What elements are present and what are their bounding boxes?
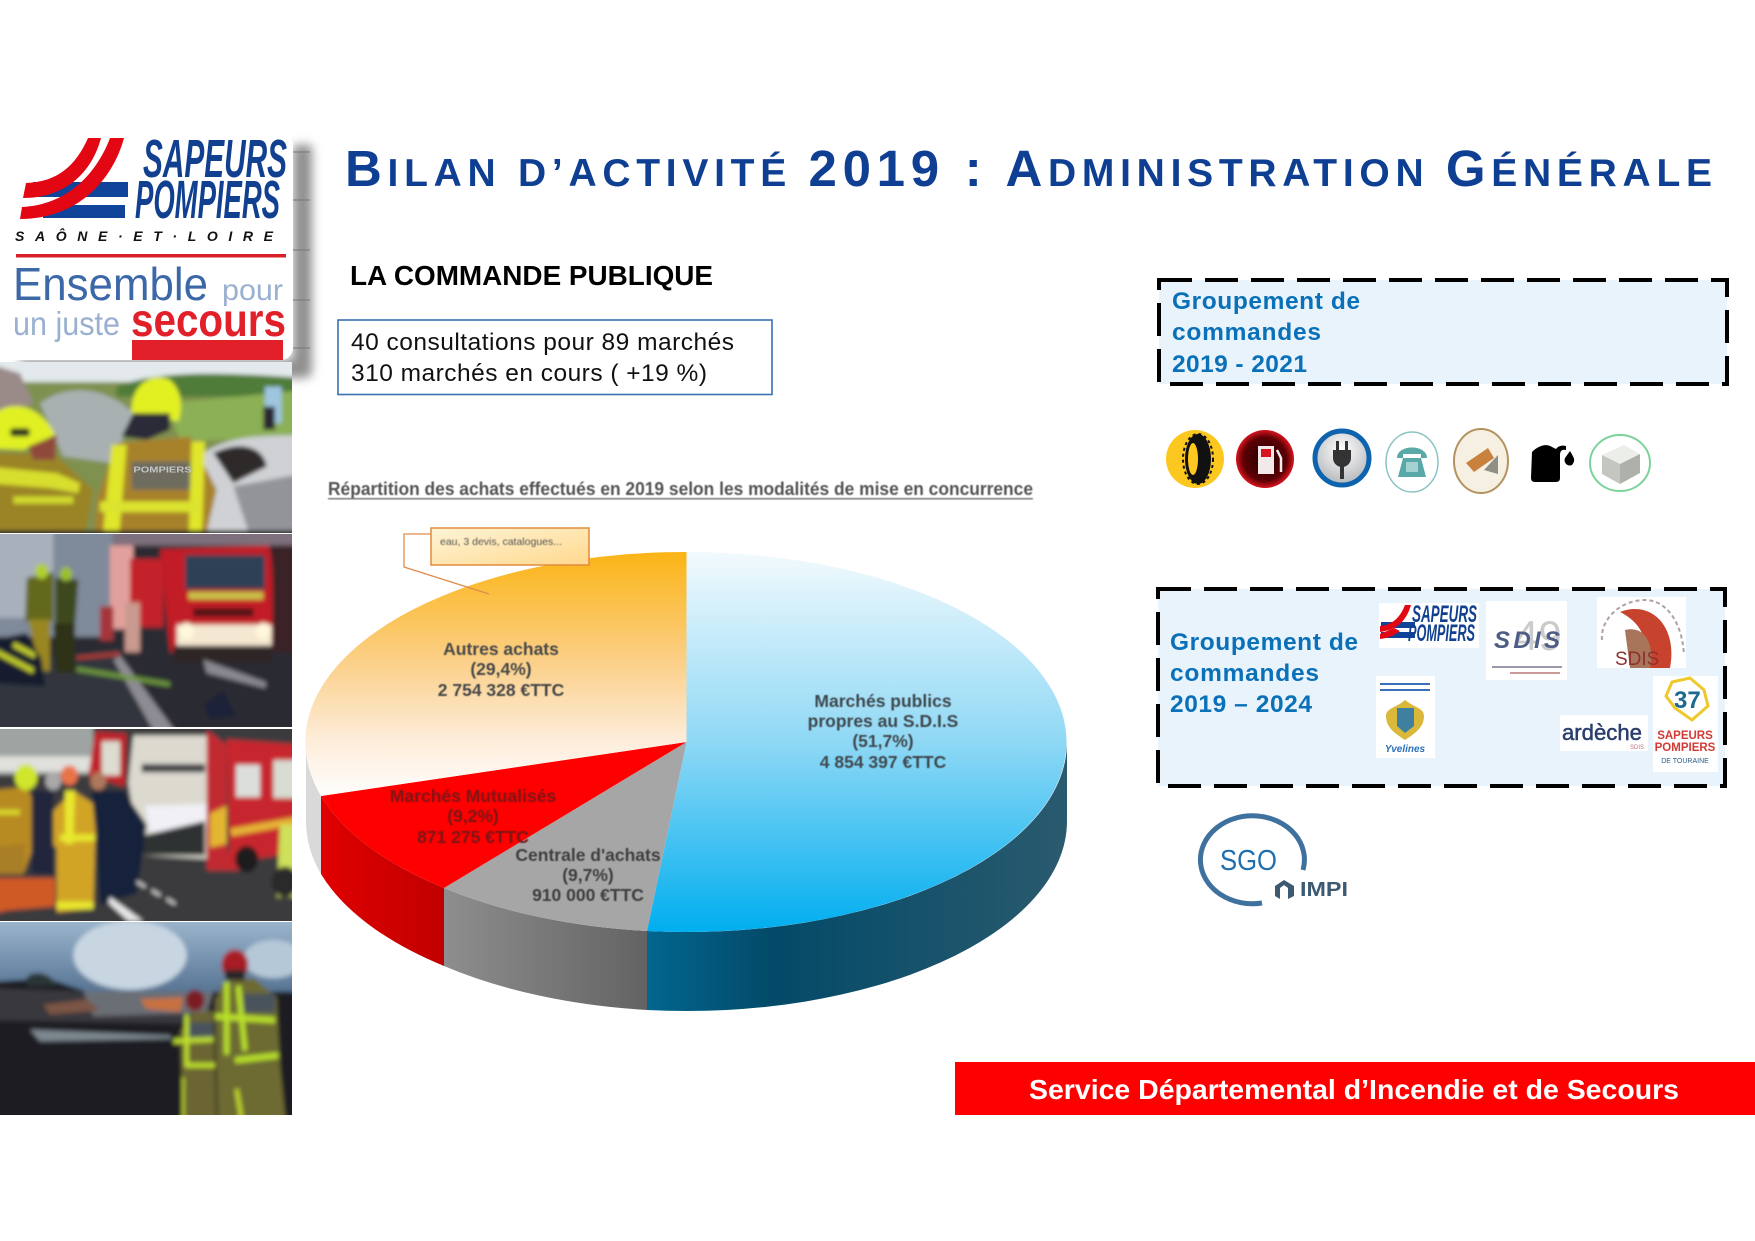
logo card (5, 129, 312, 378)
logo: sapeurs pompiers 71: POMPIERS (1408, 620, 1475, 647)
icon row (1166, 429, 1650, 493)
logo: ardèche (1560, 715, 1648, 751)
logo: pompiers de touraine: POMPIERS (1655, 742, 1716, 754)
slice: marchés publics (647, 552, 1066, 932)
logo slogan: Ensemble (13, 258, 208, 310)
logo: yvelines (1376, 676, 1435, 758)
logo: yvelines: Yvelines (1385, 744, 1426, 755)
logo: sdis 49 (1486, 601, 1567, 680)
icon: tire (1166, 430, 1224, 488)
photo: feu de végétation (0, 907, 305, 1130)
logo: sdis rouge (1597, 597, 1686, 670)
label: centrale d'achats: 910 000 €TTC (532, 885, 644, 905)
logo slogan: un juste (13, 305, 120, 342)
photo: fourgon incendie (0, 519, 305, 742)
label: marchés publics: propres au S.D.I.S (808, 711, 958, 731)
label: marchés publics: 4 854 397 €TTC (820, 752, 947, 772)
label: marchés publics: Marchés publics (814, 691, 952, 711)
icon: plug (1315, 431, 1369, 485)
label: centrale d'achats: Centrale d'achats (515, 845, 661, 865)
logo slogan: pour (222, 274, 283, 307)
logo: pompiers de touraine: SAPEURS (1657, 730, 1713, 742)
callout: eau, 3 devis (404, 528, 589, 594)
label: autres achats (438, 639, 565, 700)
icon: desk (1454, 429, 1508, 493)
slice: marchés mutualisés (321, 742, 686, 888)
logo: sdis 49: SDIS (1494, 627, 1560, 654)
logo slogan: secours (131, 294, 286, 346)
logo: ardèche: ardèche (1562, 720, 1642, 745)
label: marchés mutualisés: Marchés Mutualisés (390, 786, 556, 806)
logo: ardèche: SDIS (1630, 745, 1644, 751)
logo wordmark: SAPEURS (143, 129, 287, 189)
label: marchés mutualisés (390, 786, 556, 847)
icon: fuel pump (1236, 430, 1294, 488)
label: marchés publics: (51,7%) (852, 731, 914, 751)
panel: groupement 2019-2024: commandes (1170, 660, 1319, 687)
logo: pompiers de touraine (1653, 676, 1718, 772)
icon: oil can (1531, 445, 1574, 482)
logo: sapeurs pompiers 71 (1379, 601, 1479, 648)
label: marchés mutualisés: 871 275 €TTC (417, 827, 529, 847)
logo wordmark: POMPIERS (135, 170, 280, 230)
photo: secours à personne (0, 714, 305, 936)
logo: pompiers de touraine: 37 (1674, 687, 1701, 714)
panel: groupement 2019-2024: Groupement de (1170, 629, 1358, 656)
label: autres achats: 2 754 328 €TTC (438, 680, 565, 700)
text box: consultations: 310 marchés en cours ( +19 %) (351, 360, 707, 387)
callout: eau, 3 devis: eau, 3 devis, catalogues... (440, 536, 562, 548)
pie chart (305, 528, 1067, 1011)
slice: centrale d'achats (444, 742, 686, 931)
label: marchés mutualisés: (9,2%) (447, 806, 499, 826)
logo: sgo impi: SGO (1220, 845, 1277, 877)
panel: groupement 2019-2024 (1158, 589, 1725, 786)
logo swoosh (20, 138, 128, 219)
text box: consultations (338, 320, 772, 394)
logo: sgo impi (1200, 816, 1348, 904)
icon: paper block (1590, 435, 1650, 491)
label: centrale d'achats: (9,7%) (562, 865, 614, 885)
photo: désincarcération (0, 349, 305, 546)
logo: sgo impi: IMPI (1300, 879, 1348, 901)
heading: la commande publique: LA COMMANDE PUBLIQUE (350, 260, 713, 291)
logo: pompiers de touraine: DE TOURAINE (1661, 758, 1709, 765)
chart title: Répartition des achats effectués en 2019 selon les modalités de mise en concurrence (328, 479, 1033, 499)
text box: consultations: 40 consultations pour 89 marchés (351, 329, 734, 356)
label: centrale d'achats (515, 845, 661, 905)
slice: autres achats (305, 552, 686, 796)
logo wordmark (135, 129, 287, 230)
panel: groupement 2019-2024: 2019 – 2024 (1170, 691, 1312, 718)
title: BILAN D’ACTIVITÉ 2019 : ADMINISTRATION GÉNÉRALE (345, 140, 1712, 197)
panel: groupement 2019-2021: 2019 - 2021 (1172, 351, 1307, 378)
panel: groupement 2019-2021: commandes (1172, 319, 1321, 346)
logo slogan (13, 258, 286, 360)
label: autres achats: Autres achats (443, 639, 559, 659)
panel: groupement 2019-2021 (1159, 280, 1727, 384)
pie side (306, 742, 1067, 1011)
logo: sdis 49: 49 (1515, 612, 1562, 659)
panel: groupement 2019-2021: Groupement de (1172, 288, 1360, 315)
logo: sapeurs pompiers 71: SAPEURS (1412, 601, 1477, 628)
footer band: Service Départemental d’Incendie et de Secours (1029, 1074, 1679, 1105)
footer band (955, 1062, 1755, 1115)
label: marchés publics (808, 691, 958, 772)
photo: désincarcération: POMPIERS (133, 464, 192, 474)
label: autres achats: (29,4%) (470, 659, 532, 679)
logo: sdis rouge: SDIS (1615, 649, 1659, 670)
icon: telephone (1386, 432, 1438, 492)
logo department: SAÔNE·ET·LOIRE (15, 227, 274, 244)
